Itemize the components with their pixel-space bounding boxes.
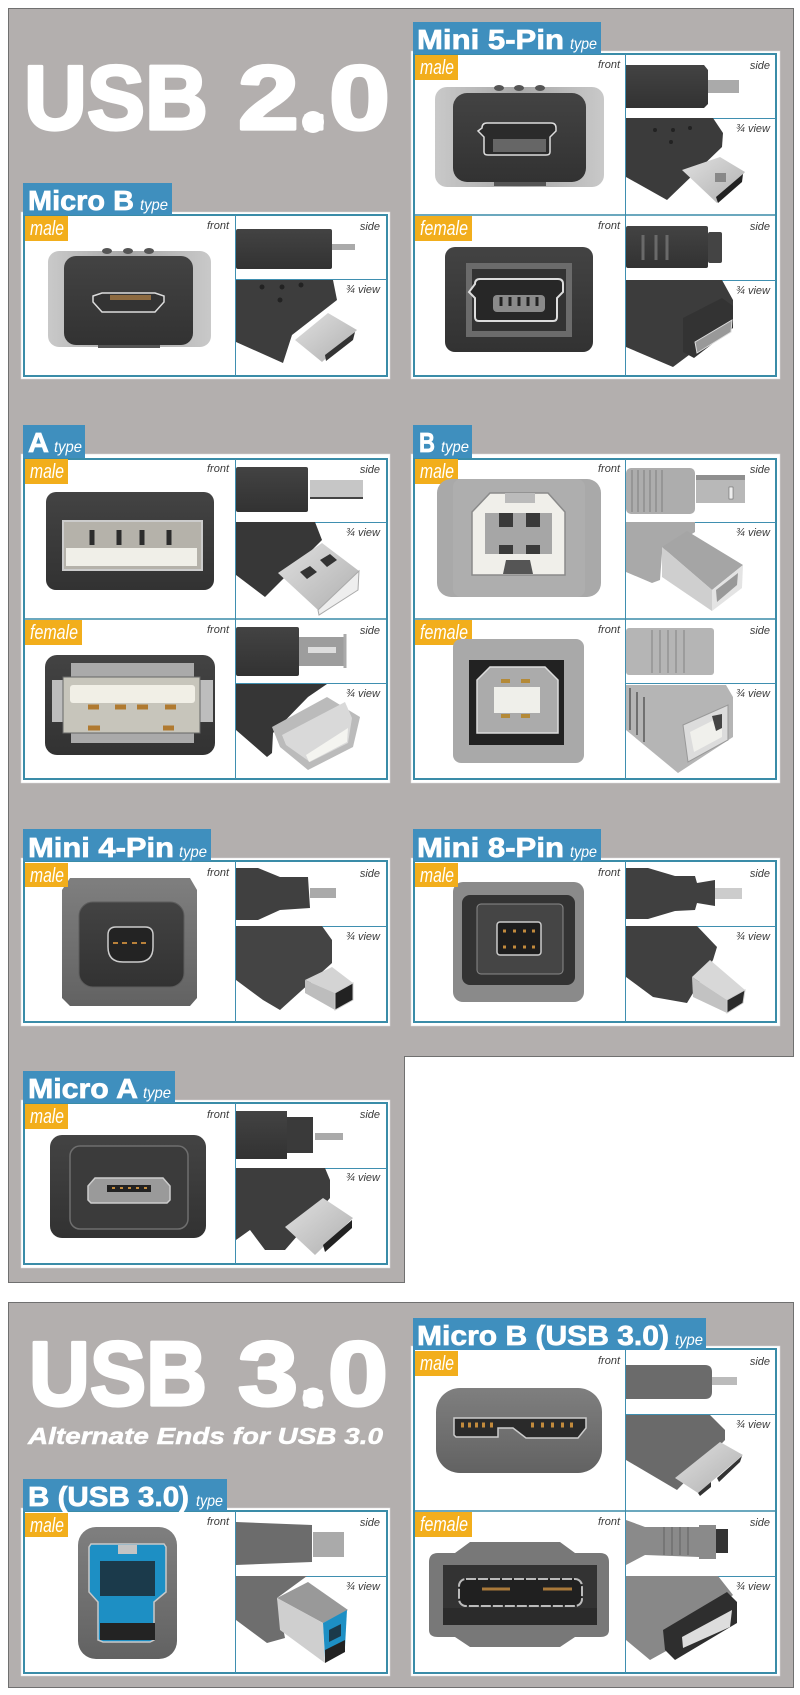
icon: A female three-quarter [236,684,360,770]
view labels: ¾ view [346,688,381,700]
card: Mini 8-Pin [411,829,780,1026]
icon: A female side [236,627,345,676]
view labels: ¾ view [346,1581,381,1593]
view labels: side [360,464,380,476]
icon: Mini 8-Pin male front [453,882,584,1002]
heading tab: Micro B type: type [140,197,168,214]
card frame [21,212,390,379]
view labels: side [750,1356,770,1368]
view labels: front [207,624,230,636]
tag: male: male [420,1353,454,1375]
icon: B female side [626,628,714,675]
heading tab: Mini 8-Pin type [413,829,601,863]
title: USB 2.0: 2.0 [238,48,390,149]
card frame [411,858,780,1026]
view labels: ¾ view [346,284,381,296]
view labels: front [207,867,230,879]
title: USB 2.0 [24,48,390,149]
title: USB 3.0: 3.0 [238,1324,388,1425]
heading tab: A type: A [28,427,49,458]
card: Micro B (USB 3.0) [411,1318,780,1676]
view labels: side [750,221,770,233]
view labels [598,59,771,135]
icon: Micro A male side [236,1111,343,1159]
panel: USB 2.0 background [8,8,794,1282]
tag: male: male [420,865,454,887]
label: three-quarter view: ¾ view [736,1581,771,1593]
card: Micro A [21,1071,390,1268]
heading tab: B (USB 3.0) type: type [196,1493,223,1510]
heading tab: Micro B type: Micro B [28,185,134,216]
view labels: front [598,624,621,636]
tag: male: male [30,1106,64,1128]
tag: male: male [30,461,64,483]
heading tab: Mini 5-Pin type: type [570,36,597,53]
subtitle: Alternate Ends for USB 3.0: Alternate Ends for USB 3.0 [27,1423,383,1449]
icon: Micro B male front [48,248,211,348]
icon: Micro B (USB 3.0) female three-quarter [626,1576,737,1660]
tag: male: male [420,57,454,79]
view labels: ¾ view [346,527,381,539]
icon: Mini 5-Pin female three-quarter [626,280,733,367]
card: Micro B [21,183,390,379]
icon: Mini 8-Pin male three-quarter [626,926,745,1013]
icon: Micro B (USB 3.0) male front [436,1388,602,1473]
view labels [207,624,381,700]
icon: Micro B (USB 3.0) male side [626,1365,737,1399]
tag: male: male [30,865,64,887]
tag: male: male [30,1515,64,1537]
icon: Mini 5-Pin female side [626,226,722,268]
view labels: ¾ view [736,527,771,539]
view labels [207,220,381,296]
view labels: front [598,220,621,232]
heading tab: Mini 4-Pin type: type [179,844,207,861]
card frame [21,1508,390,1676]
icon: Mini 4-Pin male front [62,878,197,1006]
view labels [207,463,381,539]
card frame [21,1100,390,1268]
card: B (USB 3.0) [21,1479,390,1676]
heading tab: Micro B type [23,183,172,216]
card: A [21,425,390,783]
icon: Mini 5-Pin male three-quarter [626,118,745,203]
view labels: side [750,868,770,880]
tag: female: female [420,1514,468,1536]
icon: B male side [626,468,745,514]
view labels: ¾ view [736,1419,771,1431]
view labels: ¾ view [346,931,381,943]
view labels: front [598,1516,621,1528]
heading tab: Micro B (USB 3.0) type: Micro B (USB 3.0) [417,1320,669,1351]
heading tab: Mini 5-Pin type [413,22,601,55]
icon: Micro A male three-quarter [236,1168,353,1255]
heading tab: Micro A type: Micro A [28,1073,138,1104]
icon: Mini 5-Pin female front [445,247,593,352]
card frame [411,51,780,379]
card: Mini 4-Pin [21,829,390,1026]
view labels: front [598,463,621,475]
icon: B female three-quarter [626,685,733,773]
icon: B female front [453,639,584,763]
view labels: side [360,625,380,637]
heading tab: Micro A type [23,1071,175,1104]
view labels [598,220,771,297]
card frame [411,1346,780,1676]
view labels: ¾ view [346,1172,381,1184]
card frame [21,858,390,1026]
view labels [598,463,771,539]
heading tab: Mini 4-Pin type: Mini 4-Pin [28,832,174,863]
card: B [411,425,780,783]
tag: male: male [30,218,64,240]
icon: A female front [45,655,215,755]
heading tab: Mini 8-Pin type: type [570,844,597,861]
label: three-quarter view: ¾ view [736,688,771,700]
heading tab: B (USB 3.0) type: B (USB 3.0) [28,1481,189,1512]
view labels: side [750,60,770,72]
title: USB 3.0 [29,1324,388,1425]
view labels: ¾ view [736,123,771,135]
view labels: side [360,221,380,233]
view labels: front [207,1109,230,1121]
heading tab: Mini 5-Pin type: Mini 5-Pin [417,24,564,55]
view labels: front [598,867,621,879]
heading tab: A type [23,425,85,458]
heading tab: A type: type [54,439,82,456]
icon: B (USB 3.0) male three-quarter [236,1576,348,1663]
icon: Micro B male side [236,229,355,269]
card frame [21,454,390,783]
heading tab: B type: type [441,439,469,456]
icon: Mini 8-Pin male side [626,868,742,919]
tag: female: female [420,622,468,644]
icon: A male three-quarter [236,522,359,615]
view labels: front [207,463,230,475]
view labels: side [360,868,380,880]
icon: Mini 4-Pin male side [236,868,336,920]
view labels: front [598,1355,621,1367]
view labels: ¾ view [736,285,771,297]
view labels [598,1355,771,1431]
card: Mini 5-Pin [411,22,780,379]
icon: B (USB 3.0) male front [78,1527,177,1659]
view labels: side [360,1517,380,1529]
view labels [207,1516,381,1593]
heading tab: B type [413,425,472,458]
card frame [411,454,780,783]
icon: Micro B (USB 3.0) female front [429,1542,609,1647]
tag: female: female [420,218,468,240]
title: USB 3.0: USB [29,1324,207,1425]
heading tab: B type: B [419,427,435,458]
icon: B male front [437,479,601,597]
view labels [598,624,770,637]
icon: A male side [236,467,363,512]
icon: Mini 4-Pin male three-quarter [236,926,353,1010]
view labels: front [598,59,621,71]
tag: female: female [30,622,78,644]
heading tab: Micro B (USB 3.0) type: type [675,1332,703,1349]
view labels [207,867,381,943]
view labels: side [750,464,770,476]
heading tab: Mini 4-Pin type [23,829,211,863]
panel: USB 3.0 background [8,1302,794,1688]
view labels [207,1109,381,1184]
view labels: side [750,1517,770,1529]
view labels: side [360,1109,380,1121]
heading tab: Mini 8-Pin type: Mini 8-Pin [417,832,564,863]
view labels: side [750,625,770,637]
icon: Micro B (USB 3.0) male three-quarter [626,1415,743,1496]
heading tab: Micro A type: type [143,1085,171,1102]
icon: Mini 5-Pin male front [435,85,604,187]
view labels [598,867,771,943]
view labels: front [207,1516,230,1528]
view labels [598,1516,770,1529]
view labels: front [207,220,230,232]
icon: B male three-quarter [626,522,743,611]
icon: Micro B male three-quarter [236,280,357,363]
icon: Micro A male front [50,1135,206,1238]
icon: Micro B (USB 3.0) female side [626,1520,728,1565]
icon: A male front [46,492,214,590]
title: USB 2.0: USB [24,48,208,149]
icon: Mini 5-Pin male side [626,65,739,108]
view labels: ¾ view [736,931,771,943]
icon: B (USB 3.0) male side [236,1522,344,1565]
tag: male: male [420,461,454,483]
